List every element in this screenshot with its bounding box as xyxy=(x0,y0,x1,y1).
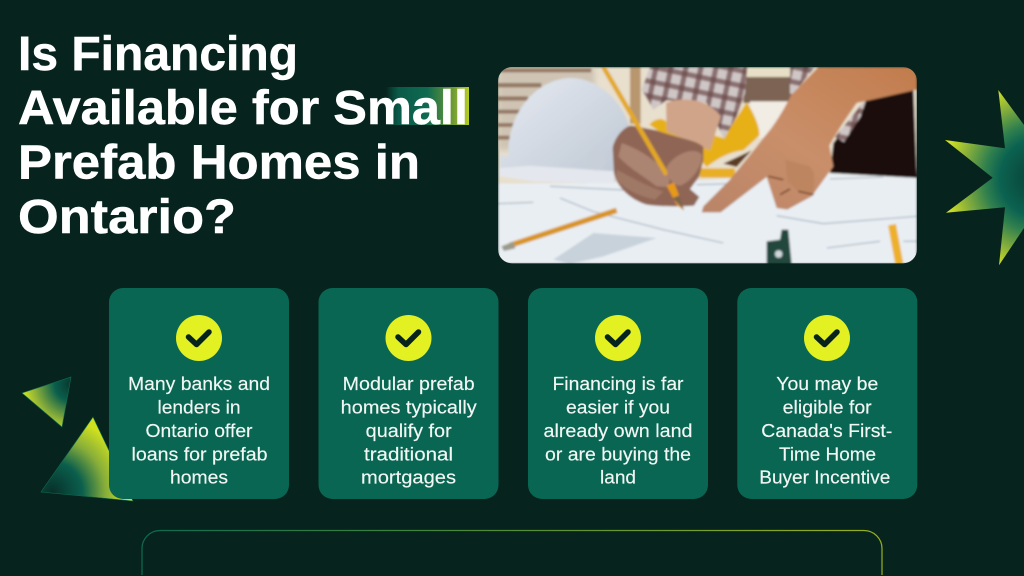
card text: You may be xyxy=(776,374,878,394)
icon: check xyxy=(386,315,432,361)
hard hat white xyxy=(499,78,630,184)
card text xyxy=(341,374,477,488)
icon: check xyxy=(595,315,641,361)
card background xyxy=(109,288,289,499)
photo: hands drawing on blueprints xyxy=(498,67,917,264)
card background xyxy=(528,288,708,499)
outlined bottom panel xyxy=(142,530,882,575)
card text: Canada's First- xyxy=(761,421,892,441)
card text: homes typically xyxy=(341,398,477,418)
panel: bank loans card xyxy=(109,288,289,499)
card text: Modular prefab xyxy=(343,374,475,394)
title lines: Available for Small xyxy=(18,82,468,135)
writing hand xyxy=(613,126,703,206)
right pencil xyxy=(892,225,899,264)
panel: land ownership card xyxy=(528,288,708,499)
panel: modular mortgages card xyxy=(318,288,498,499)
clamp object xyxy=(767,230,792,264)
thumb xyxy=(667,151,702,186)
title xyxy=(18,28,469,244)
card text: easier if you xyxy=(566,398,670,418)
card text xyxy=(759,374,892,488)
card text: Many banks and xyxy=(128,374,270,394)
card text: eligible for xyxy=(783,398,872,418)
card text: mortgages xyxy=(361,468,456,488)
dark clothing xyxy=(830,86,917,178)
title lines: Prefab Homes in xyxy=(18,136,420,190)
card text: homes xyxy=(170,468,228,488)
pencil upper xyxy=(603,67,667,175)
pencil tip xyxy=(667,182,684,210)
card text: already own land xyxy=(544,421,692,441)
lower pencil xyxy=(510,210,617,245)
large triangle decoration xyxy=(41,417,133,501)
hard hat yellow xyxy=(649,102,759,167)
star decoration xyxy=(945,90,1024,265)
card text: Time Home xyxy=(779,444,876,464)
plaid sleeve xyxy=(642,67,747,139)
card text: Buyer Incentive xyxy=(759,468,890,488)
blueprint paper xyxy=(498,173,917,264)
card text xyxy=(544,374,692,488)
title highlight xyxy=(386,87,469,125)
card text: lenders in xyxy=(158,398,240,418)
card text: land xyxy=(600,468,636,488)
title lines: Is Financing xyxy=(18,28,298,81)
pointing hand xyxy=(702,67,917,212)
card text xyxy=(128,374,270,488)
card background xyxy=(737,288,917,499)
title lines xyxy=(18,28,468,244)
card background xyxy=(318,288,498,499)
forearm xyxy=(666,99,721,150)
title lines: Ontario? xyxy=(18,191,236,244)
icon: check xyxy=(176,315,222,361)
card text: qualify for xyxy=(366,421,452,441)
card text: or are buying the xyxy=(545,444,691,464)
card text: loans for prefab xyxy=(132,444,268,464)
card text: traditional xyxy=(364,444,453,464)
panel: first-time buyer card xyxy=(737,288,917,499)
small triangle decoration xyxy=(22,377,71,427)
card text: Ontario offer xyxy=(146,421,252,441)
card text: Financing is far xyxy=(552,374,684,394)
icon: check xyxy=(804,315,850,361)
